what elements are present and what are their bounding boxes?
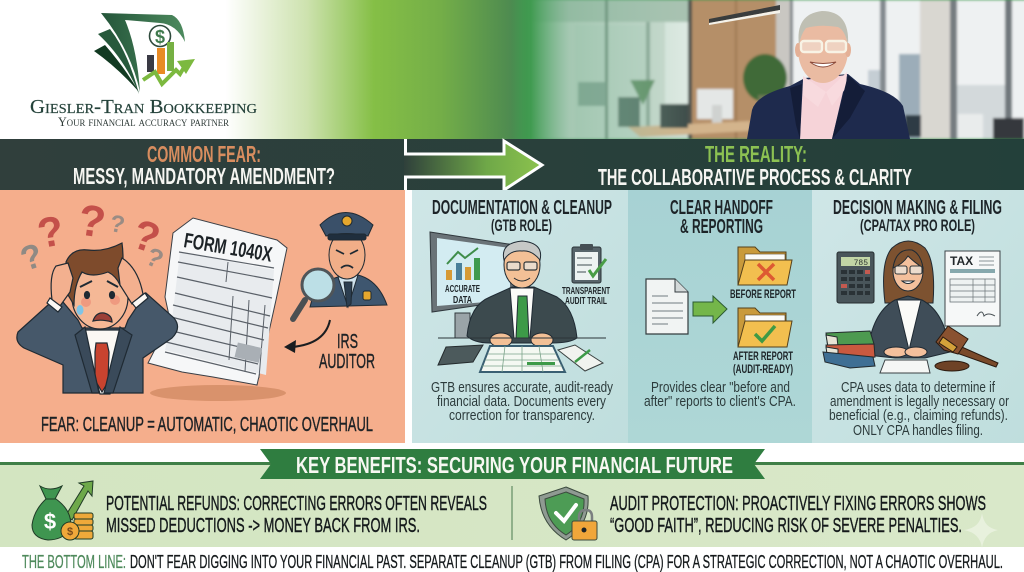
arrow: fear to reality — [404, 139, 542, 190]
body text — [644, 379, 796, 410]
icon: after report folder — [738, 308, 792, 347]
icon: monitor with chart: ACCURATE — [445, 284, 480, 295]
panel heading: CLEAR HANDOFF — [670, 197, 773, 219]
label: irs auditor — [319, 331, 375, 373]
icon: paper on desk — [880, 360, 930, 373]
sparkle watermark — [964, 513, 998, 548]
illustration: shadow — [150, 385, 286, 401]
body text: GTB ensures accurate, audit-ready — [431, 379, 613, 396]
company logo — [94, 13, 195, 94]
body text: correction for transparency. — [449, 407, 595, 424]
tagline: Your financial accuracy partner — [58, 115, 229, 129]
icon: money bag with coins: $ — [67, 526, 73, 538]
company name: Giesler-Tran Bookkeeping — [30, 96, 257, 118]
panel heading: DOCUMENTATION & CLEANUP — [432, 197, 612, 219]
portrait of man — [747, 11, 910, 139]
benefit text: potential refunds: MISSED DEDUCTIONS -> MONEY BACK FROM IRS. — [106, 515, 420, 537]
label: after report — [733, 349, 793, 376]
header office photo — [510, 0, 1024, 139]
benefit text: potential refunds: POTENTIAL REFUNDS: CORRECTING ERRORS OFTEN REVEALS — [106, 493, 487, 515]
icon: before report folder — [738, 247, 792, 285]
form title: FORM 1040X — [182, 229, 274, 267]
ribbon heading — [260, 449, 765, 479]
icon: calculator: 785 — [854, 259, 868, 268]
ceiling light — [709, 5, 780, 25]
label: irs auditor: IRS — [337, 331, 358, 353]
illustration: bookkeeper — [467, 241, 577, 347]
label: before report: BEFORE REPORT — [730, 289, 796, 301]
ribbon heading: KEY BENEFITS: SECURING YOUR FINANCIAL FUTURE — [296, 452, 733, 478]
body text — [431, 379, 613, 424]
heading: common fear: MESSY, MANDATORY AMENDMENT? — [73, 163, 335, 189]
icon: monitor with chart: DATA — [453, 295, 472, 306]
label: transparent audit trail: TRANSPARENT — [562, 286, 610, 297]
question marks: ? — [34, 206, 67, 257]
question marks: ? — [127, 210, 166, 263]
divider — [511, 486, 513, 540]
body text: financial data. Documents every — [437, 393, 606, 410]
icon: tax document — [945, 251, 1000, 326]
icon: tax document: TAX — [950, 254, 973, 268]
body text: Provides clear "before and — [651, 379, 790, 396]
body text: ONLY CPA handles filing. — [853, 422, 983, 439]
panel heading — [670, 197, 773, 238]
panel heading — [833, 197, 1002, 235]
heading: common fear — [73, 141, 335, 189]
panel: clear handoff and reporting — [628, 190, 812, 443]
panel: key benefits — [0, 449, 1024, 548]
body text — [829, 379, 1009, 439]
benefit text: audit protection — [610, 493, 986, 537]
panel heading — [432, 197, 612, 235]
label: transparent audit trail — [562, 286, 610, 307]
icon: money bag with coins: $ — [44, 509, 56, 534]
icon: gavel — [935, 326, 998, 371]
body text: after" reports to client's CPA. — [644, 393, 796, 410]
icon: document — [646, 279, 688, 334]
caption: fear: FEAR: CLEANUP = AUTOMATIC, CHAOTIC OVERHAUL — [41, 414, 373, 436]
heading: common fear: COMMON FEAR: — [147, 141, 261, 167]
arrow: auditor pointing at form — [284, 320, 330, 353]
heading: the reality — [598, 141, 912, 190]
company logo: $ — [155, 27, 165, 47]
arrow: document to folders — [693, 296, 727, 323]
icon: clipboard audit trail — [572, 244, 606, 283]
desk items — [438, 338, 606, 372]
icon: book stack — [823, 331, 875, 368]
icon: money bag with coins — [32, 481, 93, 540]
label: after report: (AUDIT-READY) — [733, 362, 793, 376]
panel: documentation and cleanup — [412, 190, 628, 443]
benefit text: potential refunds — [106, 493, 487, 537]
panel heading: (GTB ROLE) — [491, 216, 552, 235]
question marks: ? — [16, 236, 47, 279]
illustration: cpa woman — [867, 241, 950, 358]
bottom line: THE BOTTOM LINE: — [22, 552, 126, 572]
icon: calculator — [837, 252, 874, 303]
panel: common fear — [0, 190, 405, 443]
question marks: ? — [141, 241, 168, 275]
label: transparent audit trail: AUDIT TRAIL — [565, 296, 607, 307]
label: after report: AFTER REPORT — [733, 349, 793, 363]
panel: decision making and filing — [812, 190, 1024, 443]
panel heading: & REPORTING — [680, 216, 763, 238]
header gradient background — [0, 0, 1024, 139]
question marks: ? — [75, 196, 109, 248]
illustration: crumpled form 1040X — [148, 218, 287, 385]
icon: monitor with chart — [430, 232, 515, 338]
label: irs auditor: AUDITOR — [319, 351, 375, 373]
icon: shield with padlock — [539, 487, 597, 540]
dark title band — [0, 139, 1024, 190]
question marks: ? — [108, 210, 127, 239]
question marks — [16, 196, 168, 279]
heading: the reality: THE REALITY: — [705, 141, 807, 167]
illustration: worried man — [17, 243, 178, 394]
illustration: irs auditor — [293, 212, 387, 319]
